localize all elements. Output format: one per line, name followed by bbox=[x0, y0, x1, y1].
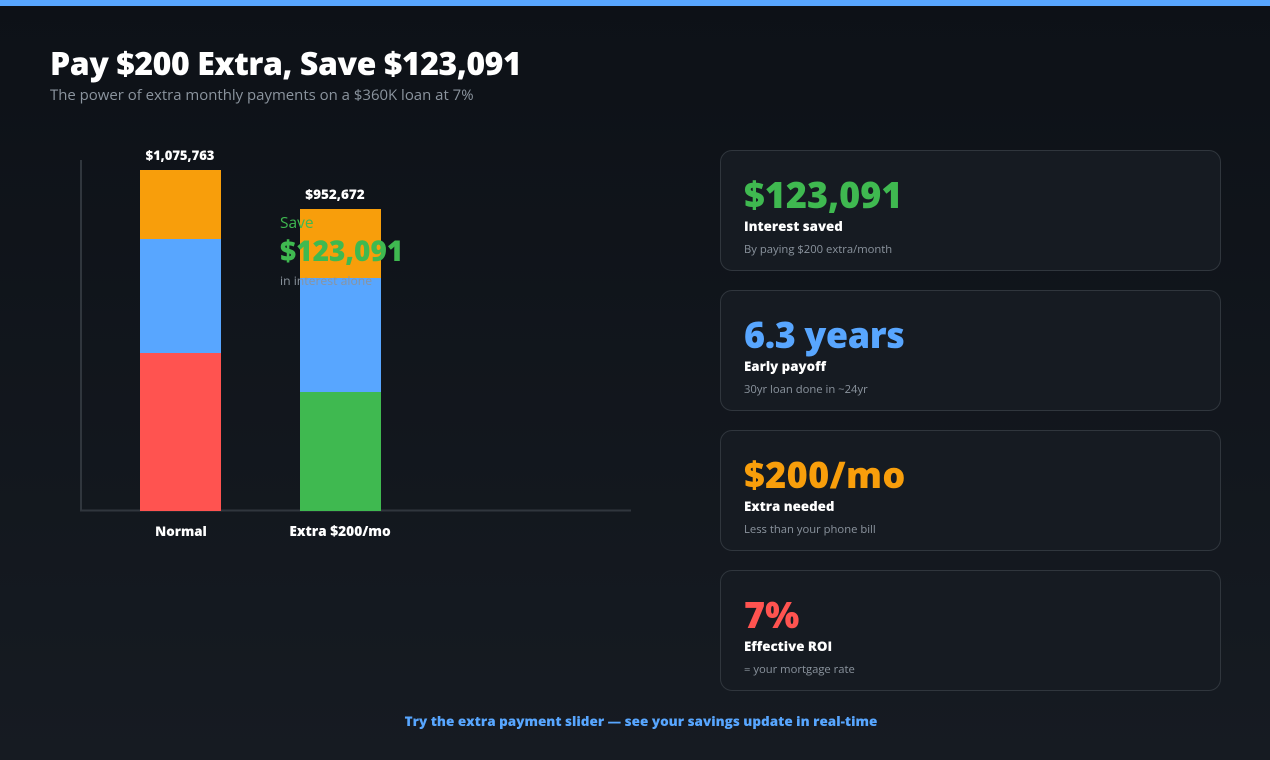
bar: normal bbox=[140, 170, 221, 511]
axis label: normal: Normal bbox=[155, 522, 207, 540]
card: extra needed bbox=[720, 430, 1221, 551]
savings callout bbox=[280, 211, 403, 289]
card: extra needed: $200/mo bbox=[744, 450, 906, 499]
footer call to action: Try the extra payment slider — see your savings update in real-time bbox=[405, 712, 877, 730]
chart axes bbox=[81, 160, 631, 510]
axis label: extra: Extra $200/mo bbox=[289, 522, 391, 541]
card: interest saved: $123,091 bbox=[744, 170, 902, 219]
card: effective ROI: Effective ROI bbox=[744, 637, 832, 655]
title: Pay $200 Extra, Save $123,091 bbox=[50, 42, 521, 85]
value label: normal total: $1,075,763 bbox=[146, 146, 215, 164]
card: extra needed: Extra needed bbox=[744, 497, 834, 515]
card: extra needed: Less than your phone bill bbox=[744, 522, 876, 537]
card: interest saved: Interest saved bbox=[744, 217, 843, 235]
savings callout: Save bbox=[280, 211, 314, 233]
card: interest saved bbox=[720, 150, 1221, 271]
savings callout: in interest alone bbox=[280, 272, 372, 289]
card: early payoff: 30yr loan done in ~24yr bbox=[744, 382, 868, 397]
bar: extra $200/mo bbox=[300, 209, 381, 511]
subtitle: The power of extra monthly payments on a $360K loan at 7% bbox=[50, 85, 474, 105]
savings callout: $123,091 bbox=[280, 232, 403, 270]
card: early payoff bbox=[720, 290, 1221, 411]
card: early payoff: Early payoff bbox=[744, 357, 826, 375]
card: interest saved: By paying $200 extra/month bbox=[744, 242, 892, 257]
card: early payoff: 6.3 years bbox=[744, 310, 904, 359]
top accent bar bbox=[0, 0, 1270, 6]
card: effective ROI: 7% bbox=[744, 590, 799, 639]
card: effective ROI: = your mortgage rate bbox=[744, 662, 855, 677]
card: effective ROI bbox=[720, 570, 1221, 691]
value label: extra total: $952,672 bbox=[305, 185, 365, 203]
